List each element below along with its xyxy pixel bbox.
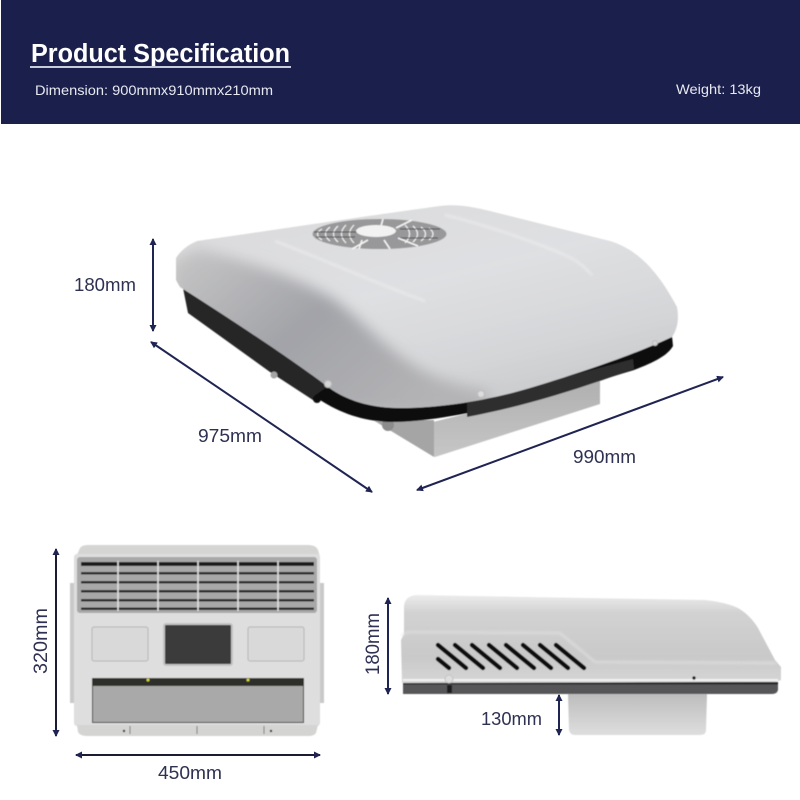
side tabs	[70, 583, 76, 703]
white shell	[176, 205, 678, 408]
lower box	[568, 694, 707, 735]
dimension: 975mm depth	[151, 342, 372, 492]
body	[74, 554, 320, 726]
label: 180mm	[74, 275, 136, 295]
shell flank shading	[170, 248, 490, 420]
dimension: 130mm	[481, 695, 559, 735]
dimension: 990mm width	[417, 377, 723, 490]
weight text: Weight: 13kg	[676, 81, 761, 97]
dot	[692, 676, 696, 680]
label: 180mm	[363, 613, 384, 675]
dimension: 180mm side	[363, 598, 388, 694]
centre display	[164, 624, 232, 665]
label: 450mm	[158, 763, 222, 783]
product: front view	[70, 545, 324, 736]
title underline	[30, 66, 291, 68]
dimension text: Dimension: 900mmx910mmx210mm	[35, 82, 273, 98]
black band	[314, 336, 673, 422]
right panel	[248, 627, 304, 661]
lower outlet	[92, 678, 304, 723]
feet	[270, 372, 278, 378]
left panel	[92, 627, 148, 661]
vent grille	[77, 557, 317, 613]
bottom cap	[77, 725, 318, 736]
shell	[401, 595, 781, 683]
fasteners	[324, 380, 332, 388]
product: perspective view	[170, 205, 678, 457]
product: side view	[401, 595, 781, 735]
base band	[403, 682, 778, 694]
top cap	[76, 545, 320, 557]
side grille	[183, 288, 335, 402]
shell step highlight	[402, 632, 776, 663]
title: Product Specification	[31, 40, 290, 68]
lower box	[433, 380, 600, 457]
shell ridges	[275, 215, 592, 301]
label: 130mm	[481, 709, 542, 729]
dimension: 180mm height	[74, 239, 153, 331]
label: 975mm	[198, 426, 262, 446]
label: 320mm	[31, 608, 52, 674]
vent slots	[438, 645, 584, 668]
fan grille	[312, 218, 447, 250]
sensor	[313, 395, 321, 403]
header banner	[1, 0, 800, 124]
fastener	[445, 675, 453, 683]
label: 990mm	[573, 447, 636, 467]
